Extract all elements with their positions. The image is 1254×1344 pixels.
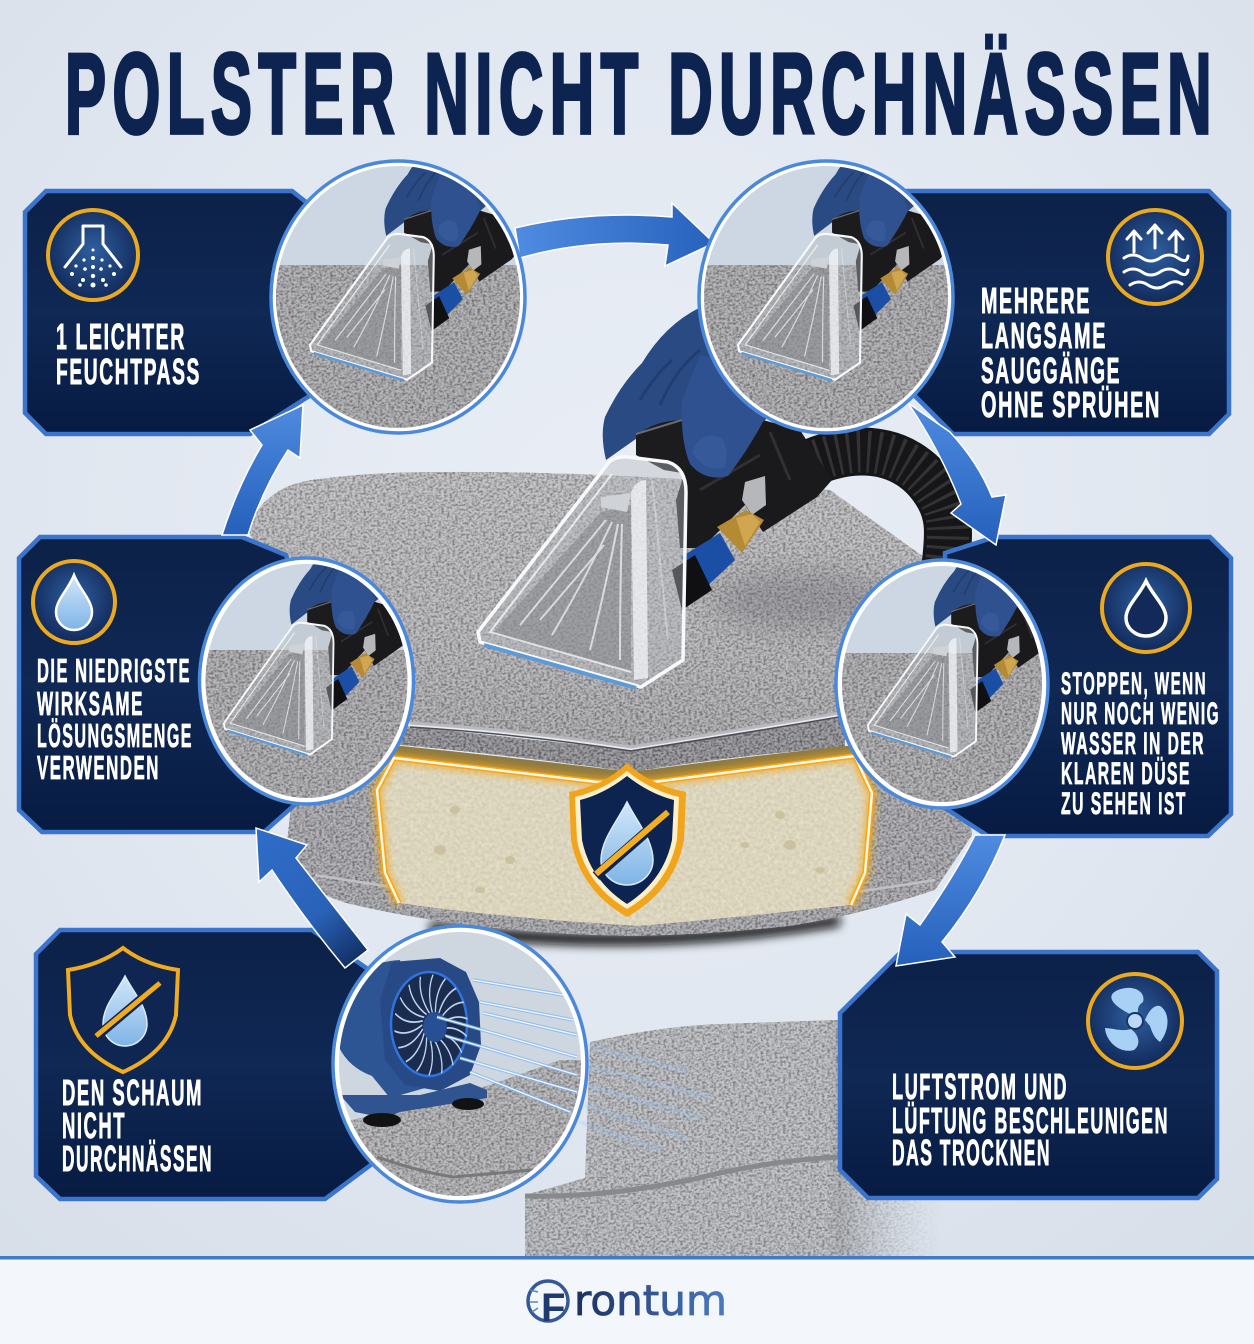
- panel 4 text: [1061, 665, 1220, 821]
- arrow: step 6 to step 1: [222, 405, 303, 535]
- panel 3 text: [37, 652, 193, 786]
- arrow: step 1 to step 2: [515, 203, 714, 266]
- icon: droplet: [33, 561, 115, 643]
- gold boundary highlight: [377, 756, 872, 905]
- central shield icon: [569, 763, 686, 917]
- shield slash: [596, 813, 668, 876]
- icon: outlined droplet: [1102, 564, 1190, 652]
- foam pores: [434, 806, 825, 893]
- blower blades: [394, 974, 468, 1076]
- panel 6: [840, 952, 1217, 1198]
- panel 3: LÖSUNGSMENGE: [37, 717, 193, 754]
- logo letter F: F: [541, 1286, 565, 1330]
- photo circle: step 3: [198, 556, 416, 806]
- panel 6 text: [892, 1066, 1169, 1173]
- panel 2 text: MEHRERE: [981, 280, 1091, 321]
- panel 2 text: SAUGGÄNGE: [981, 350, 1121, 391]
- icon: spray nozzle: [48, 210, 138, 300]
- panel 3 text: DIE NIEDRIGSTE: [37, 652, 191, 689]
- blower body: [336, 960, 425, 1098]
- panel 1 text: 1 LEICHTER: [56, 316, 186, 357]
- foam shadow gap: [392, 745, 856, 784]
- main extraction tool with hand: [478, 300, 948, 688]
- panel 5 text: [62, 1072, 213, 1179]
- panel 1: [25, 191, 335, 434]
- logo: [528, 1276, 727, 1330]
- footer band: [0, 1256, 1254, 1344]
- upper cushion: [248, 472, 924, 747]
- panel 4: [945, 537, 1231, 836]
- airflow outside the circle: [580, 1045, 710, 1150]
- panel 2 text: [981, 280, 1161, 425]
- panel 5: DURCHNÄSSEN: [62, 1138, 213, 1179]
- foam core: [377, 758, 872, 926]
- arrow: step 3 to step 4: [896, 835, 1005, 966]
- shield droplet: [601, 802, 653, 885]
- logo ring: [528, 1281, 568, 1321]
- air streams: [437, 980, 577, 1112]
- logo wordmark: rontum: [574, 1276, 727, 1325]
- arrow: step 5 to step 6: [256, 828, 368, 968]
- cushion lip: [400, 716, 845, 772]
- icon: fan: [1088, 974, 1182, 1068]
- panel 1 text: [56, 316, 201, 392]
- icon: suction waves: [1108, 210, 1202, 304]
- photo circle: step 1: [269, 159, 527, 435]
- lower cushion piping: [315, 875, 935, 917]
- panel 3 text: WIRKSAME: [37, 685, 144, 722]
- panel 3: [19, 537, 300, 832]
- panel 1 text: FEUCHTPASS: [56, 351, 201, 392]
- panel 6 text: DAS TROCKNEN: [892, 1132, 1051, 1173]
- arrow: step 2 to step 3: [908, 403, 1006, 545]
- blower base: [340, 1083, 487, 1118]
- panel 2: [880, 191, 1229, 434]
- panel 5 text: NICHT: [62, 1105, 126, 1146]
- lower cushion: [285, 770, 972, 936]
- panel 5: [36, 930, 372, 1199]
- icon: shield with crossed droplet: [68, 948, 178, 1072]
- logo circuit traces: [530, 1290, 538, 1312]
- lower sofa seat: [525, 1020, 950, 1256]
- blower housing: [380, 958, 481, 1091]
- photo circle: step 2: [697, 159, 955, 435]
- panel 3 text: VERWENDEN: [37, 749, 160, 786]
- photo circle: step 4: [834, 558, 1050, 810]
- main cushion with foam cutaway: [248, 472, 972, 945]
- panel 2 text: LANGSAME: [981, 315, 1107, 356]
- tool shadow: [710, 570, 890, 630]
- photo circle: step 5 with blower fan: [330, 925, 590, 1205]
- gold boundary line: [377, 756, 872, 905]
- cushion ridge shadow: [410, 717, 839, 751]
- panel 5 text: DEN SCHAUM: [62, 1072, 203, 1113]
- cushion ridge: [410, 713, 839, 747]
- panel 6 text: LUFTSTROM UND: [892, 1066, 1068, 1107]
- gold boundary glow: [377, 756, 872, 905]
